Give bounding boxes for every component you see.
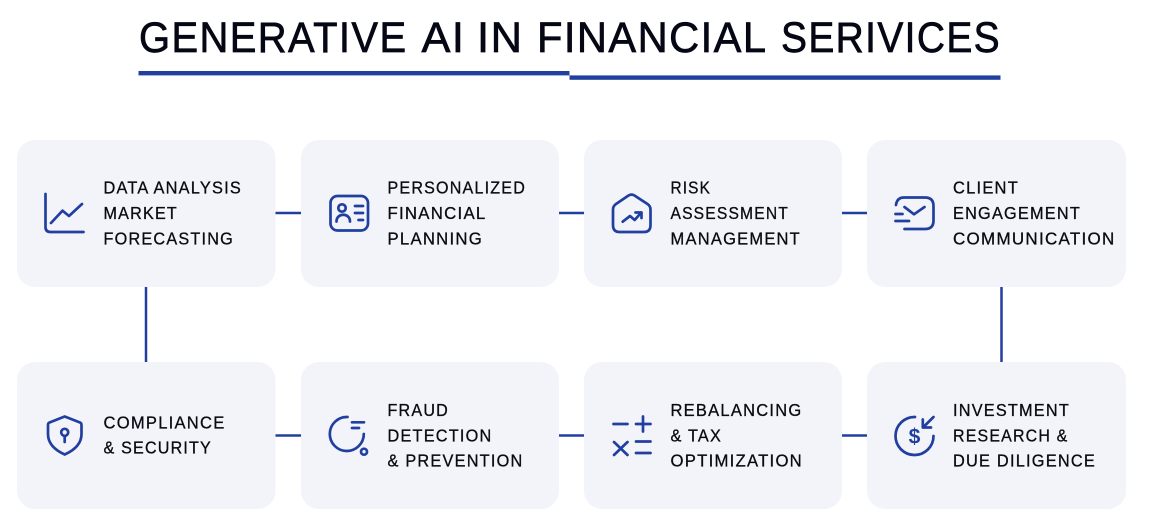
label: rebalancing and tax optimization: OPTIMIZATION [670,450,803,470]
label: personalized financial planning: PERSONALIZED [388,178,526,198]
label: data analysis market forecasting: MARKET [104,203,178,223]
panel: client engagement communication [867,140,1126,287]
title [139,14,1001,62]
icon: dollar with inward arrow [896,417,934,455]
title: IN [477,14,524,62]
icon: math operators [614,416,650,455]
label: client engagement communication: ENGAGEMENT [953,203,1081,223]
title: FINANCIAL [537,14,768,62]
label: fraud detection and prevention: & PREVENTION [388,450,524,470]
panel: compliance and security [17,362,276,509]
panel: fraud detection and prevention [301,362,559,509]
label: data analysis market forecasting [104,178,242,248]
panel: risk assessment management [584,140,842,287]
panel: data analysis market forecasting [17,140,276,287]
label: data analysis market forecasting: DATA ANALYSIS [104,178,242,198]
label: fraud detection and prevention: FRAUD [388,400,449,420]
label: rebalancing and tax optimization: REBALANCING [670,400,802,420]
label: risk assessment management [670,178,801,248]
label: compliance and security [104,412,226,458]
label: client engagement communication [953,178,1116,248]
label: risk assessment management: MANAGEMENT [670,228,801,248]
label: client engagement communication: CLIENT [953,178,1019,198]
connector lines [146,213,1002,436]
icon: house with rising arrow [613,195,650,232]
icon: line chart [46,194,84,232]
icon: fraud detection ring [330,417,367,455]
label: rebalancing and tax optimization [670,400,803,470]
label: client engagement communication: COMMUNICATION [953,228,1116,248]
panel: investment research and due diligence [867,362,1126,509]
label: personalized financial planning: PLANNING [388,228,483,248]
label: investment research and due diligence: RESEARCH & [953,425,1068,445]
icon: shield with keyhole [48,416,82,454]
title underline [138,71,1000,80]
label: personalized financial planning [388,178,526,248]
panel: rebalancing and tax optimization [584,362,842,509]
label: fraud detection and prevention: DETECTION [388,425,492,445]
label: personalized financial planning: FINANCIAL [388,203,486,223]
label: data analysis market forecasting: FORECASTING [104,228,234,248]
icon: moving envelope [896,198,934,229]
label: compliance and security: COMPLIANCE [104,412,226,432]
label: risk assessment management: ASSESSMENT [670,203,789,223]
panel: personalized financial planning [301,140,559,287]
label: risk assessment management: RISK [670,178,711,198]
label: rebalancing and tax optimization: & TAX [670,425,722,445]
label: compliance and security: & SECURITY [104,438,212,458]
label: investment research and due diligence: DUE DILIGENCE [953,450,1096,470]
label: fraud detection and prevention [388,400,524,470]
title: GENERATIVE [139,14,408,62]
title: SERIVICES [781,14,1001,62]
icon: dollar with inward arrow: $ [909,426,921,448]
label: investment research and due diligence [953,400,1096,470]
title: AI [422,14,466,62]
label: investment research and due diligence: INVESTMENT [953,400,1070,420]
icon: profile card [330,196,368,230]
